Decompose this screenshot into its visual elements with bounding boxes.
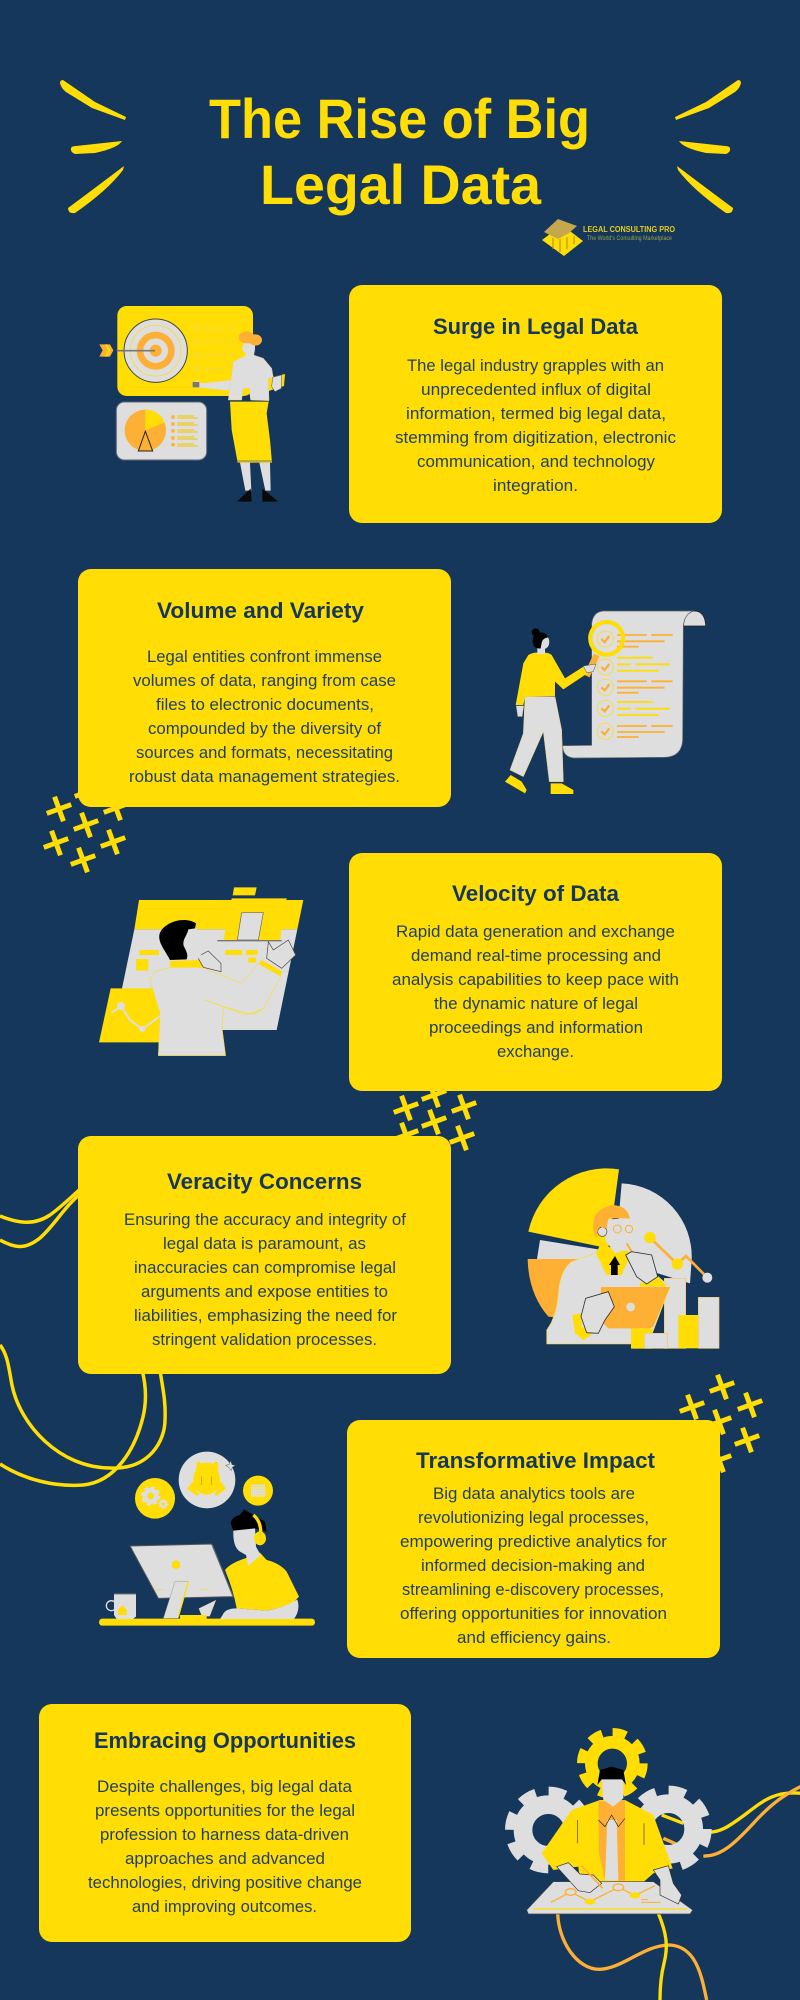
panel: Velocity of Data (349, 853, 722, 1091)
body text: analysis capabilities to keep pace with (392, 971, 679, 989)
body text: streamlining e-discovery processes, (402, 1581, 664, 1599)
yellow gear (582, 1733, 642, 1793)
body text: stringent validation processes. (152, 1331, 377, 1349)
computer monitor (130, 1544, 233, 1620)
body text: proceedings and information (429, 1019, 643, 1037)
panel: Embracing Opportunities (39, 1704, 411, 1942)
body text: sources and formats, necessitating (136, 744, 393, 762)
body text: integration. (493, 477, 578, 495)
illustration: woman inspecting checklist scroll (505, 611, 706, 794)
body text: stemming from digitization, electronic (395, 429, 676, 447)
man with headphones (198, 1509, 299, 1619)
body text: Despite challenges, big legal data (97, 1778, 353, 1796)
heading: Transformative Impact (416, 1448, 656, 1473)
body text (400, 1485, 668, 1647)
panel: Volume and Variety (78, 569, 451, 807)
body text: communication, and technology (417, 453, 656, 471)
body text: legal data is paramount, as (163, 1235, 366, 1253)
body text: volumes of data, ranging from case (133, 672, 396, 690)
icon: calendar bubble (243, 1476, 273, 1506)
body text: robust data management strategies. (129, 768, 400, 786)
illustration: man studying data board (99, 887, 303, 1056)
illustration: woman presenting target and pie chart (99, 306, 285, 502)
body text: Rapid data generation and exchange (396, 923, 675, 941)
illustration: man at computer with icons (99, 1452, 315, 1626)
body text (88, 1778, 362, 1916)
plus pattern: above Transformative card (675, 1370, 767, 1477)
body text: empowering predictive analytics for (400, 1533, 668, 1551)
body text: The legal industry grapples with an (407, 357, 664, 375)
title: The Rise of Big (209, 87, 590, 150)
analyst figure (547, 1205, 670, 1349)
heading: Volume and Variety (157, 598, 365, 623)
body text: Legal entities confront immense (147, 648, 382, 666)
body text: arguments and expose entities to (141, 1283, 388, 1301)
body text: technologies, driving positive change (88, 1874, 362, 1892)
pie chart panel (116, 402, 207, 460)
squiggle lines left side (0, 1185, 165, 1485)
bar chart (664, 1278, 719, 1348)
left burst rays (60, 80, 126, 213)
body text: Ensuring the accuracy and integrity of (124, 1211, 406, 1229)
cables (558, 1786, 800, 2000)
title: Legal Data (260, 153, 542, 216)
heading: Velocity of Data (452, 881, 620, 906)
body text (124, 1211, 406, 1349)
pie chart backdrop (528, 1168, 692, 1320)
body text: exchange. (497, 1043, 574, 1061)
body text: profession to harness data-driven (100, 1826, 349, 1844)
plus pattern: below Velocity card (389, 1078, 481, 1155)
panel: Transformative Impact (347, 1420, 720, 1658)
logo: Legal Consulting Pro (542, 219, 675, 256)
heading: Surge in Legal Data (433, 314, 639, 339)
data board (122, 887, 303, 1030)
woman figure (193, 331, 285, 502)
illustration: man with gears and cables (511, 1733, 800, 2000)
icon: gears bubble (135, 1478, 175, 1519)
body text (395, 357, 676, 495)
desk (99, 1619, 315, 1626)
mug (106, 1594, 136, 1619)
logo: Legal Consulting Pro: LEGAL CONSULTING PRO (583, 225, 675, 234)
right burst rays (675, 80, 741, 213)
title (209, 87, 590, 216)
woman figure (505, 628, 596, 794)
document scroll (563, 611, 706, 758)
body text: and improving outcomes. (132, 1898, 317, 1916)
icon: frog bubble (179, 1452, 235, 1508)
body text: compounded by the diversity of (148, 720, 381, 738)
body text: offering opportunities for innovation (400, 1605, 667, 1623)
line chart card (99, 988, 162, 1042)
body text: unprecedented influx of digital (421, 381, 651, 399)
chart tablet (527, 1882, 693, 1914)
magnifying glass (587, 622, 623, 676)
heading: Embracing Opportunities (94, 1728, 356, 1753)
plus pattern: below Volume card (39, 775, 133, 877)
body text: inaccuracies can compromise legal (134, 1259, 396, 1277)
body text: revolutionizing legal processes, (418, 1509, 649, 1527)
illustration: analyst with pie chart and bars (528, 1168, 719, 1349)
body text: demand real-time processing and (411, 947, 661, 965)
body text: presents opportunities for the legal (95, 1802, 355, 1820)
body text: and efficiency gains. (457, 1629, 611, 1647)
line graph markers (644, 1232, 712, 1283)
logo: Legal Consulting Pro: The World's Consulting Marketplace (587, 236, 673, 242)
body text (129, 648, 400, 786)
panel: Veracity Concerns (78, 1136, 451, 1374)
gray gear left (511, 1793, 586, 1867)
heading: Veracity Concerns (167, 1169, 362, 1194)
body text: approaches and advanced (125, 1850, 325, 1868)
body text: Big data analytics tools are (433, 1485, 635, 1503)
body text: files to electronic documents, (156, 696, 374, 714)
body text: informed decision-making and (421, 1557, 645, 1575)
panel: Surge in Legal Data (349, 285, 722, 523)
gray gear right (631, 1792, 706, 1866)
man figure (150, 920, 296, 1056)
body text: information, termed big legal data, (406, 405, 666, 423)
hands and pencil (557, 1863, 682, 1904)
man figure (542, 1767, 673, 1882)
body text: the dynamic nature of legal (434, 995, 638, 1013)
body text: liabilities, emphasizing the need for (134, 1307, 398, 1325)
target board (99, 306, 253, 396)
body text (392, 923, 679, 1061)
